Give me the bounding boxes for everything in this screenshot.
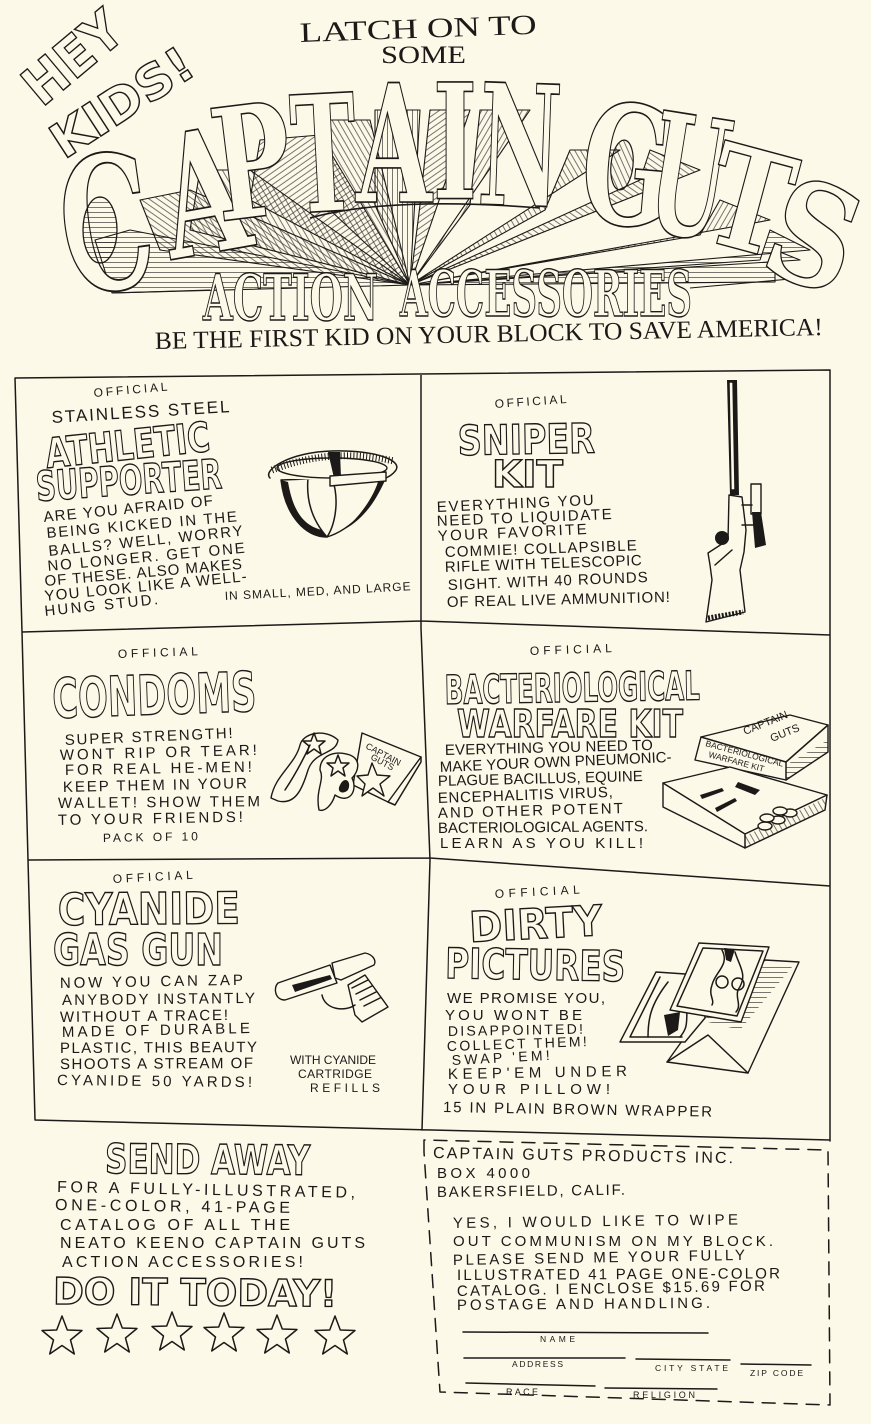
description: CYANIDE 50 YARDS!	[57, 1072, 252, 1091]
latch on to some	[299, 10, 537, 69]
order message: POSTAGE AND HANDLING.	[457, 1295, 710, 1314]
form fields: RACE	[506, 1387, 538, 1397]
official label: OFFICIAL	[494, 883, 580, 901]
icon: kit box: CAPTAIN	[742, 709, 790, 738]
captain guts lettering: G	[574, 66, 680, 267]
catalog offer: ACTION ACCESSORIES!	[62, 1254, 303, 1271]
description: EVERYTHING YOU	[436, 492, 594, 516]
description: NOW YOU CAN ZAP	[60, 972, 243, 992]
icon: sniper rifle	[706, 380, 766, 622]
description: MADE OF DURABLE	[62, 1020, 250, 1041]
form fields: RELIGION	[633, 1390, 695, 1400]
panel: athletic supporter	[34, 380, 411, 620]
order message: PLEASE SEND ME YOUR FULLY	[453, 1247, 745, 1269]
description: YOU LOOK LIKE A WELL-	[44, 568, 247, 605]
hey kids burst text: KIDS!	[40, 36, 205, 170]
title: WARFARE KIT	[457, 702, 683, 746]
panel: cyanide gas gun	[53, 868, 388, 1095]
panel: bacteriological warfare kit	[438, 641, 828, 852]
title: GAS GUN	[53, 925, 223, 976]
icon: gas gun	[275, 953, 388, 1022]
sunburst rays	[95, 110, 810, 293]
official label: OFFICIAL	[494, 392, 567, 411]
description: ENCEPHALITIS VIRUS,	[438, 784, 613, 807]
description: COLLECT THEM!	[447, 1033, 587, 1054]
title	[445, 896, 626, 991]
captain guts lettering: T	[689, 111, 810, 291]
dashed coupon border	[424, 1140, 830, 1405]
description: ANYBODY INSTANTLY	[62, 990, 255, 1009]
description: SUPER STRENGTH!	[64, 725, 233, 749]
latch on to some: SOME	[381, 42, 466, 69]
title: SNIPER	[457, 415, 595, 465]
description: KEEP THEM IN YOUR	[63, 775, 247, 796]
description: HUNG STUD.	[44, 591, 159, 620]
panel: condoms	[51, 644, 421, 845]
description: PLAGUE BACILLUS, EQUINE	[438, 768, 643, 790]
form fields	[463, 1332, 811, 1400]
captain guts lettering: T	[286, 58, 362, 251]
form fields: CITY STATE	[655, 1363, 728, 1373]
form fields: ZIP CODE	[750, 1368, 803, 1378]
description: SIGHT. WITH 40 ROUNDS	[447, 569, 648, 594]
send away heading: SEND AWAY	[105, 1135, 311, 1185]
icon: steel jockstrap	[269, 451, 397, 537]
description	[57, 972, 257, 1091]
refill note: CARTRIDGE	[298, 1067, 372, 1081]
official label: OFFICIAL	[112, 868, 193, 886]
description: COMMIE! COLLAPSIBLE	[445, 537, 637, 561]
description: WITHOUT A TRACE!	[60, 1007, 228, 1026]
icon: kit box: BACTERIOLOGICAL	[704, 738, 785, 769]
description: TO YOUR FRIENDS!	[58, 809, 243, 829]
captain guts lettering: A	[355, 48, 434, 241]
stars row	[42, 1312, 355, 1354]
catalog offer: ONE-COLOR, 41-PAGE	[55, 1197, 290, 1217]
captain guts lettering: I	[433, 49, 477, 238]
description: PLASTIC, THIS BEAUTY	[60, 1039, 257, 1057]
company address: BOX 4000	[437, 1165, 530, 1182]
description: OF REAL LIVE AMMUNITION!	[447, 589, 670, 611]
form fields: ADDRESS	[512, 1359, 563, 1369]
action accessories	[202, 257, 692, 336]
icon: photos and envelope	[620, 943, 799, 1073]
title: PICTURES	[445, 939, 626, 991]
title: ATHLETIC	[43, 413, 212, 478]
description	[43, 492, 247, 620]
captain guts lettering: N	[475, 46, 565, 247]
order message: CATALOG. I ENCLOSE $15.69 FOR	[457, 1278, 765, 1300]
description: YOU WONT BE	[445, 1007, 582, 1024]
company address: CAPTAIN GUTS PRODUCTS INC.	[433, 1145, 733, 1167]
panel: send away	[42, 1135, 365, 1354]
title	[444, 664, 700, 746]
description: EVERYTHING YOU NEED TO	[445, 737, 653, 759]
refill note: WITH CYANIDE	[290, 1053, 376, 1067]
icon: kit box: WARFARE KIT	[707, 749, 765, 774]
form fields: NAME	[540, 1334, 575, 1344]
description: RIFLE WITH TELESCOPIC	[445, 552, 642, 576]
header	[10, 0, 871, 355]
description: BALLS? WELL, WORRY	[48, 523, 243, 560]
description: FOR REAL HE-MEN!	[65, 759, 252, 779]
captain guts lettering: U	[635, 76, 742, 281]
icon: condoms and packet	[271, 733, 421, 810]
action accessories: ACTION	[202, 261, 378, 336]
do it today: DO IT TODAY!	[53, 1270, 337, 1315]
latch on to some: LATCH ON TO	[299, 10, 537, 49]
description: SHOOTS A STREAM OF	[60, 1055, 253, 1073]
company address	[433, 1145, 733, 1201]
description: SWAP 'EM!	[451, 1047, 550, 1068]
description: OF THESE. ALSO MAKES	[44, 556, 243, 590]
title	[34, 413, 223, 511]
icon: condoms and packet: CAPTAIN	[364, 741, 403, 768]
description	[436, 492, 670, 611]
description: ARE YOU AFRAID OF	[43, 492, 214, 526]
description: BACTERIOLOGICAL AGENTS.	[438, 818, 648, 837]
order message	[453, 1212, 780, 1314]
title	[457, 415, 595, 496]
description: LEARN AS YOU KILL!	[440, 835, 643, 852]
title: CONDOMS	[51, 660, 257, 731]
description: WONT RIP OR TEAR!	[60, 742, 257, 764]
description: NO LONGER. GET ONE	[47, 540, 246, 575]
description: 15 IN PLAIN BROWN WRAPPER	[443, 1099, 712, 1121]
description: DISAPPOINTED!	[448, 1021, 583, 1039]
hey kids burst text	[10, 0, 205, 170]
catalog offer	[55, 1179, 365, 1271]
official label: OFFICIAL	[93, 380, 168, 400]
catalog offer: FOR A FULLY-ILLUSTRATED,	[57, 1179, 355, 1202]
description	[443, 990, 712, 1121]
order message: OUT COMMUNISM ON MY BLOCK.	[453, 1233, 773, 1250]
title: BACTERIOLOGICAL	[444, 664, 700, 714]
catalog offer: NEATO KEENO CAPTAIN GUTS	[60, 1235, 365, 1252]
description	[58, 725, 260, 845]
description: BEING KICKED IN THE	[46, 508, 238, 542]
description: MAKE YOUR OWN PNEUMONIC-	[439, 749, 672, 776]
refill note: REFILLS	[310, 1081, 380, 1095]
title: DIRTY	[468, 896, 604, 952]
description: KEEP'EM UNDER	[448, 1063, 627, 1083]
title	[53, 883, 240, 976]
description: YOUR FAVORITE	[437, 521, 587, 545]
stainless steel: STAINLESS STEEL	[51, 397, 230, 427]
company address: BAKERSFIELD, CALIF.	[437, 1182, 625, 1201]
catalog offer: CATALOG OF ALL THE	[60, 1217, 290, 1234]
description: AND OTHER POTENT	[438, 800, 623, 822]
captain guts lettering: A	[142, 88, 264, 300]
refill note	[290, 1053, 380, 1095]
official label: OFFICIAL	[118, 644, 198, 661]
captain guts lettering: P	[202, 69, 303, 258]
description: WE PROMISE YOU,	[447, 990, 605, 1007]
official label: OFFICIAL	[530, 641, 612, 658]
captain guts lettering: C	[46, 111, 167, 339]
panel: sniper kit	[436, 380, 766, 622]
order message: ILLUSTRATED 41 PAGE ONE-COLOR	[457, 1265, 780, 1284]
description: WALLET! SHOW THEM	[58, 793, 260, 812]
description	[438, 737, 672, 852]
panel: dirty pictures	[443, 883, 799, 1121]
order grid lines	[15, 370, 830, 1141]
order message: YES, I WOULD LIKE TO WIPE	[453, 1212, 738, 1232]
description: YOUR PILLOW!	[448, 1081, 610, 1098]
description: PACK OF 10	[103, 829, 198, 845]
tagline: BE THE FIRST KID ON YOUR BLOCK TO SAVE AMERICA!	[155, 314, 823, 355]
title: CYANIDE	[58, 883, 240, 936]
icon: kit box	[663, 709, 828, 848]
title: SUPPORTER	[34, 450, 223, 511]
description: NEED TO LIQUIDATE	[436, 506, 612, 530]
sizes note: IN SMALL, MED, AND LARGE	[224, 579, 411, 603]
icon: kit box: GUTS	[769, 722, 801, 745]
panel: order coupon	[424, 1140, 830, 1405]
captain guts lettering	[46, 46, 871, 339]
icon: condoms and packet: GUTS	[369, 752, 396, 773]
title: KIT	[492, 453, 564, 496]
